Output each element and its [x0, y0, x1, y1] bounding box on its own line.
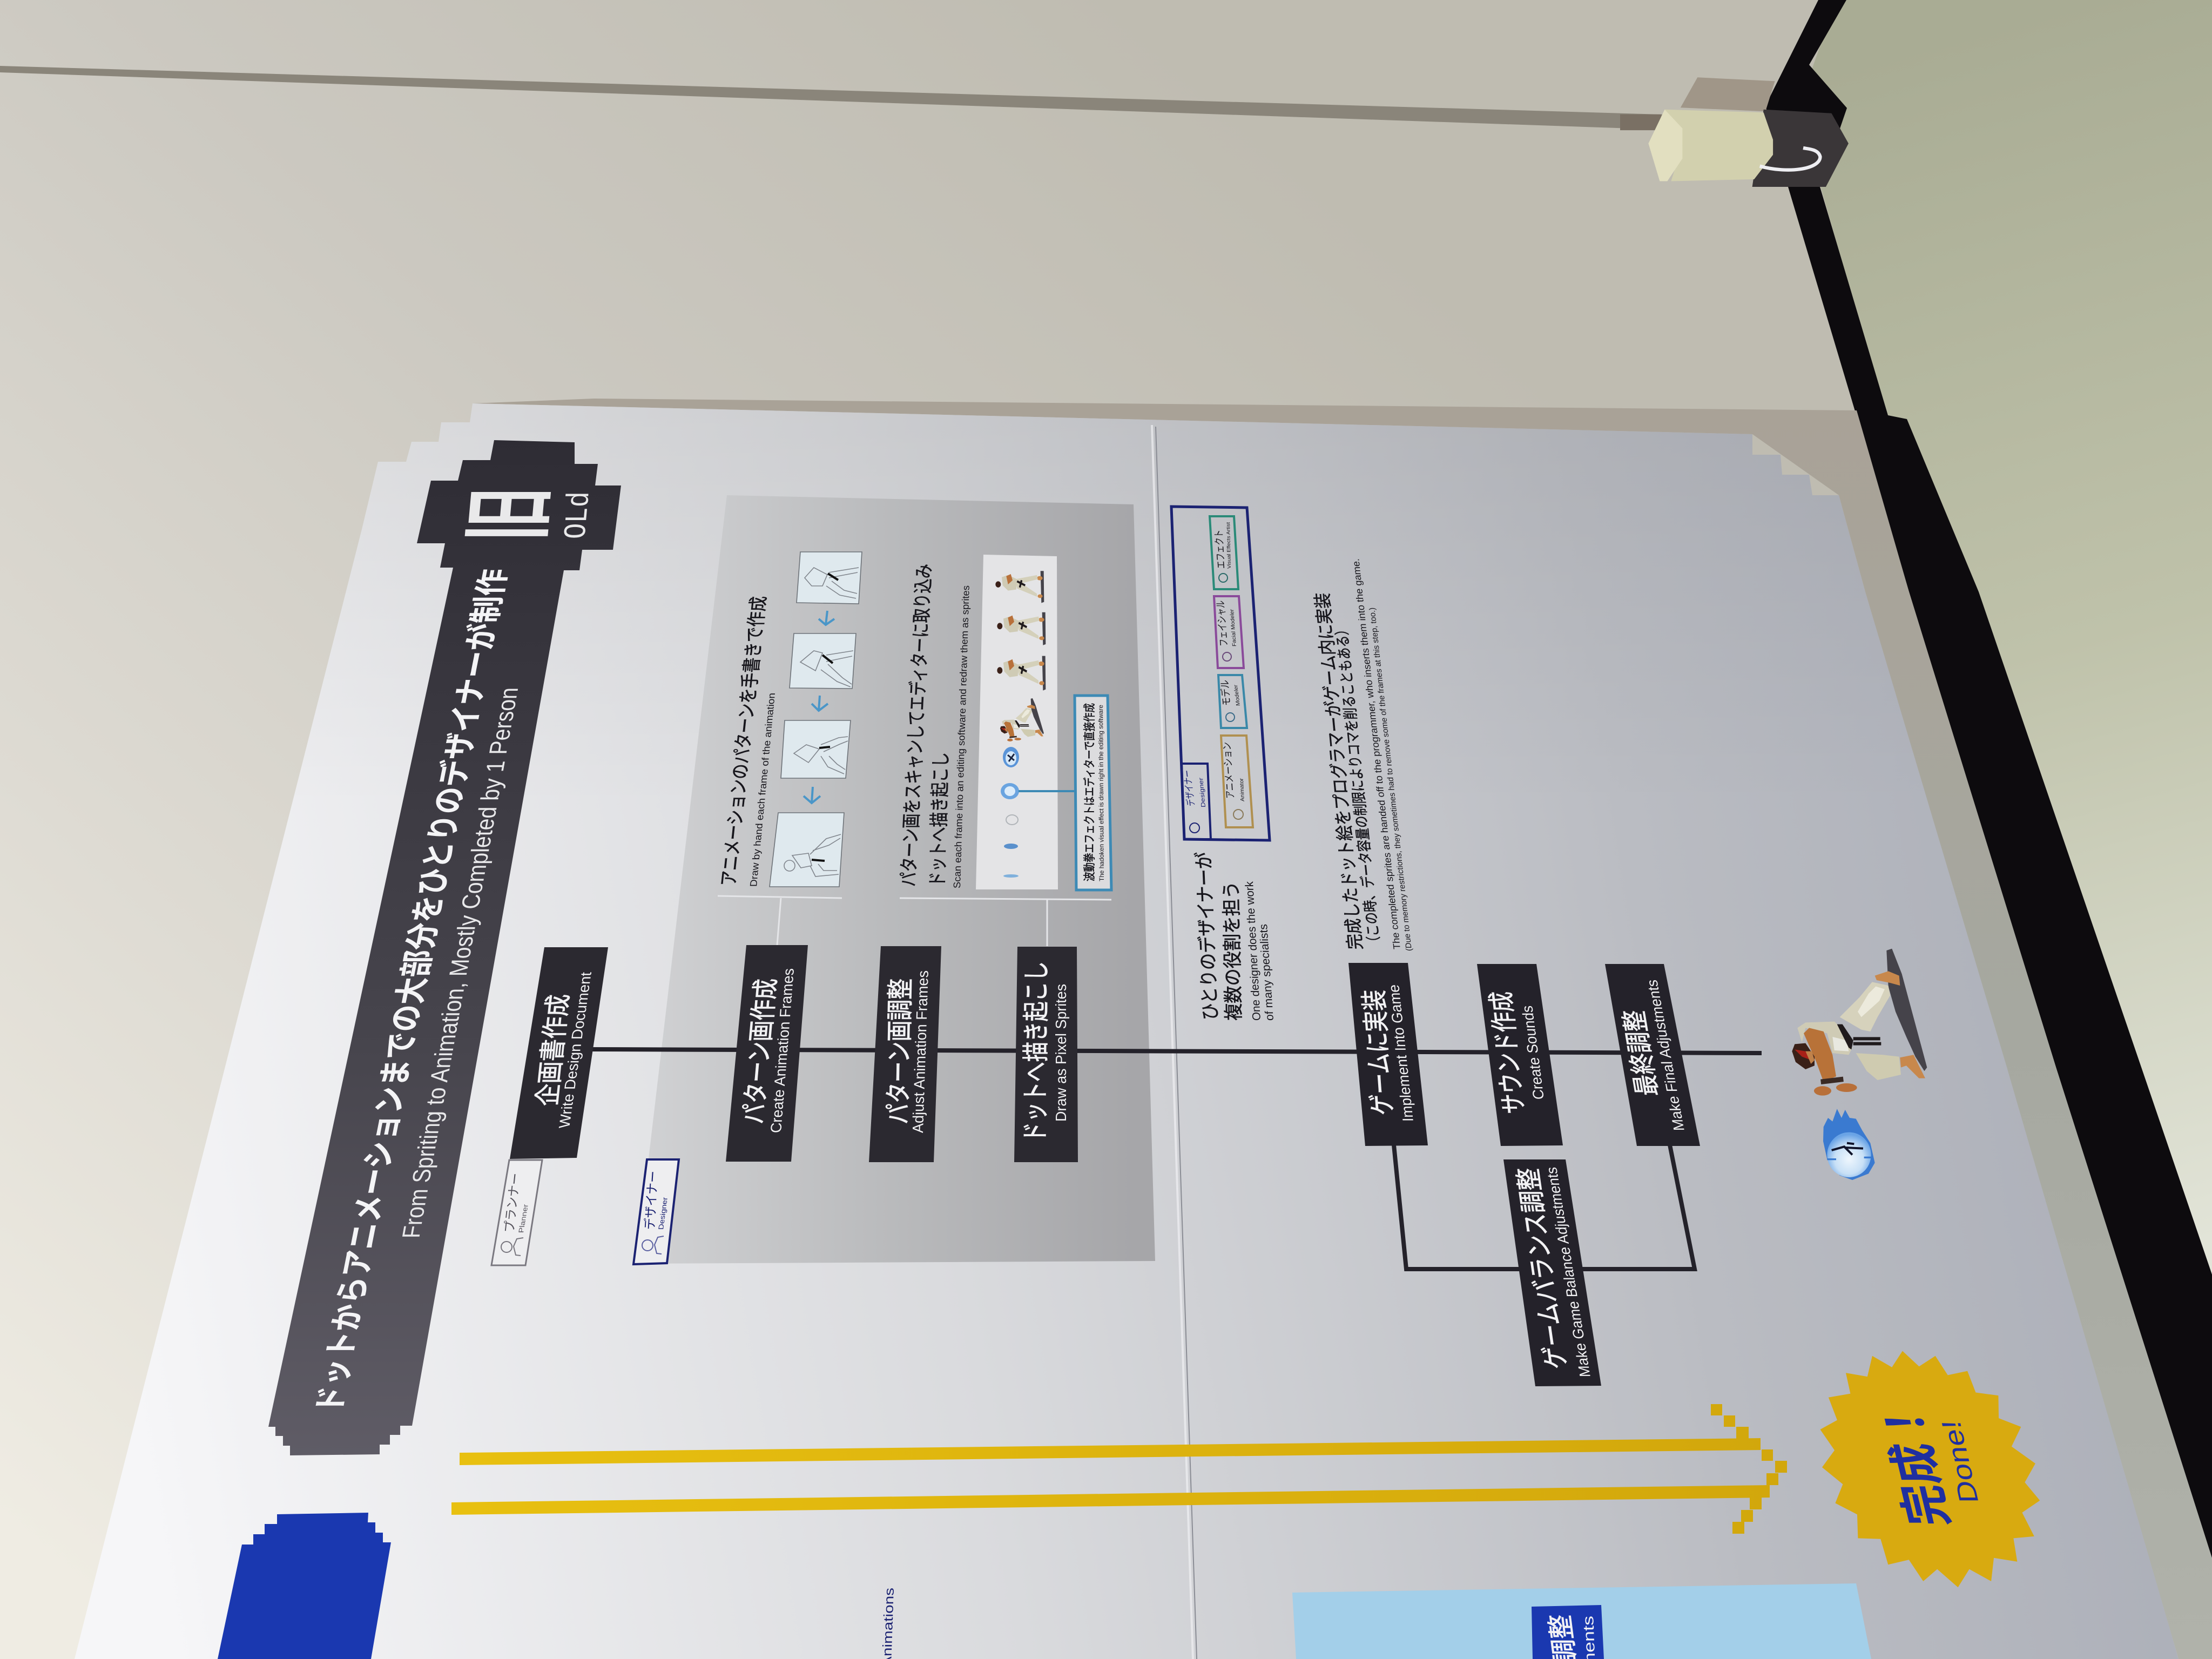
- text: one designer many roles: 複数の役割を担う: [1220, 881, 1245, 1021]
- grey designer panel: [636, 495, 1155, 1264]
- tag: planner: [491, 1160, 542, 1265]
- old kanji badge: 旧: [456, 487, 564, 541]
- text: one designer many roles: [1192, 852, 1276, 1021]
- legend tag: designer: デザイナー: [1182, 770, 1197, 806]
- step: write design document: 企画書作成: [532, 994, 574, 1106]
- step: create animation frames: [726, 945, 808, 1162]
- step: implement into game: [1348, 963, 1428, 1146]
- legend tag: facial modeler: フェイシャル: [1215, 601, 1230, 646]
- right side wall: [1798, 0, 2212, 1659]
- step: adjust animation frames: Adjust Animation Frames: [909, 970, 932, 1133]
- callout: hadoken effect: 波動拳エフェクトはエディターで直接作成: [1083, 703, 1096, 881]
- caption: scan and redraw: Scan each frame into an editing software and redraw them as sprites: [952, 585, 972, 888]
- text: one designer many roles: ひとりのデザイナーが: [1192, 852, 1222, 1020]
- old label: OLd: [559, 491, 598, 539]
- legend tag: facial modeler: Facial Modeler: [1229, 609, 1238, 646]
- loop connector: [1394, 1145, 1695, 1269]
- legend tag: effects artist: エフェクト: [1213, 530, 1228, 569]
- new method banner (cropped): [218, 1513, 391, 1659]
- text: implement into game description: [1312, 558, 1414, 951]
- step: create sounds: [1477, 964, 1563, 1146]
- step: create animation frames: Create Animation Frames: [767, 968, 797, 1133]
- step: game balance adjustments: ゲームバランス調整: [1513, 1168, 1572, 1369]
- tag: designer: デザイナー: [643, 1171, 661, 1230]
- step: game balance adjustments: Make Game Balance Adjustments: [1542, 1167, 1594, 1377]
- legend tag: modeler: モデル: [1219, 680, 1233, 706]
- tag: planner: プランナー: [502, 1173, 523, 1232]
- legend tag: modeler: Modeler: [1233, 684, 1242, 706]
- heading japanese: ドットからアニメーションまでの大部分をひとりのデザイナーが制作: [311, 569, 514, 1413]
- caption: scan and redraw: [897, 564, 972, 888]
- hand-drawn animation frames: [770, 552, 862, 887]
- step: draw as pixel sprites: [1014, 947, 1078, 1162]
- poster panel: [75, 403, 2179, 1659]
- frame sequence arrows: [804, 611, 834, 803]
- text: implement into game description: 完成したドット絵をプログラマーがゲーム内に実装: [1312, 593, 1366, 949]
- legend tag: facial modeler: [1214, 596, 1244, 668]
- step: create sounds: サウンド作成: [1486, 992, 1530, 1114]
- blue step box (cropped): [1532, 1605, 1604, 1659]
- text: implement into game description: （この時、データ容量の制限によりコマを削ることもある）: [1333, 623, 1383, 948]
- caption: scan and redraw: パターン画をスキャンしてエディターに取り込み: [897, 564, 935, 887]
- text: implement into game description: (Due to memory restrictions, they sometimes had to remove some of the frames at this step, too.): [1367, 608, 1414, 951]
- timeline line: [589, 1049, 1762, 1053]
- panel shadow on wall: [473, 399, 2212, 1659]
- legend tag: designer: Designer: [1198, 778, 1207, 807]
- legend tag: animator: Animator: [1239, 778, 1246, 801]
- dark corner gap: [1765, 0, 2212, 1558]
- step: implement into game: ゲームに実装: [1359, 990, 1398, 1115]
- step: write design document: Write Design Document: [556, 972, 595, 1128]
- step: game balance adjustments: [1503, 1159, 1601, 1386]
- step: adjust animation frames: パターン画調整: [883, 979, 916, 1124]
- legend tag: animator: アニメーション: [1222, 742, 1237, 799]
- step: create sounds: Create Sounds: [1519, 1006, 1547, 1100]
- icon: hadoken fireball: [1823, 1109, 1875, 1180]
- legend: designer roles: [1171, 507, 1270, 840]
- step: write design document: [510, 947, 608, 1159]
- ceiling seam on wall: [0, 66, 1663, 130]
- step: make final adjustments: [1605, 964, 1700, 1146]
- heading english: From Spriting to Animation, Mostly Completed by 1 Person: [396, 687, 524, 1238]
- connector stems: [718, 896, 1111, 946]
- text: implement into game description: The completed sprites are handed off to the programmer, who inserts them into the game.: [1350, 558, 1402, 949]
- step: draw as pixel sprites: ドットへ描き起こし: [1020, 961, 1052, 1142]
- legend tag: effects artist: Visual Effects Artist: [1225, 522, 1232, 569]
- icon: Ryu sprite: [1792, 949, 1927, 1096]
- legend tag: effects artist: [1210, 516, 1238, 589]
- tag: planner: Planner: [517, 1204, 530, 1233]
- tag: designer: [633, 1159, 679, 1264]
- step: draw as pixel sprites: Draw as Pixel Sprites: [1053, 984, 1069, 1122]
- step: make final adjustments: 最終調整: [1618, 1010, 1663, 1096]
- step: make final adjustments: Make Final Adjustments: [1643, 980, 1688, 1131]
- legend tag: modeler: [1218, 675, 1247, 728]
- text: one designer many roles: of many specialists: [1257, 924, 1276, 1021]
- legend tag: animator: [1221, 736, 1253, 827]
- double yellow arrow: [451, 1404, 1787, 1534]
- step: implement into game: Implement Into Game: [1385, 984, 1417, 1122]
- step: create animation frames: パターン画作成: [738, 979, 781, 1124]
- heading banner: old method: [268, 440, 621, 1455]
- caption: scan and redraw: ドットへ描き起こし: [926, 752, 952, 887]
- callout: hadoken effect: The hadoken visual effect is drawn right in the editing software: [1097, 705, 1105, 881]
- text: one designer many roles: One designer does the work: [1243, 881, 1263, 1021]
- done badge: [1820, 1351, 2040, 1587]
- sprite strip: [976, 555, 1058, 889]
- caption: draw by hand: Draw by hand each frame of the animation: [748, 693, 777, 887]
- done badge: 完成！: [1873, 1401, 1960, 1526]
- caption: draw by hand: アニメーションのパターンを手書きで作成: [717, 596, 770, 886]
- done badge: Done!: [1936, 1420, 1985, 1503]
- wall device with cable: [1620, 77, 1849, 187]
- callout: hadoken effect: [1019, 696, 1111, 890]
- step: adjust animation frames: [869, 946, 941, 1162]
- legend tag: designer: [1182, 764, 1211, 839]
- tag: designer: Designer: [657, 1197, 669, 1230]
- light blue panel (cropped): [1292, 1583, 1871, 1659]
